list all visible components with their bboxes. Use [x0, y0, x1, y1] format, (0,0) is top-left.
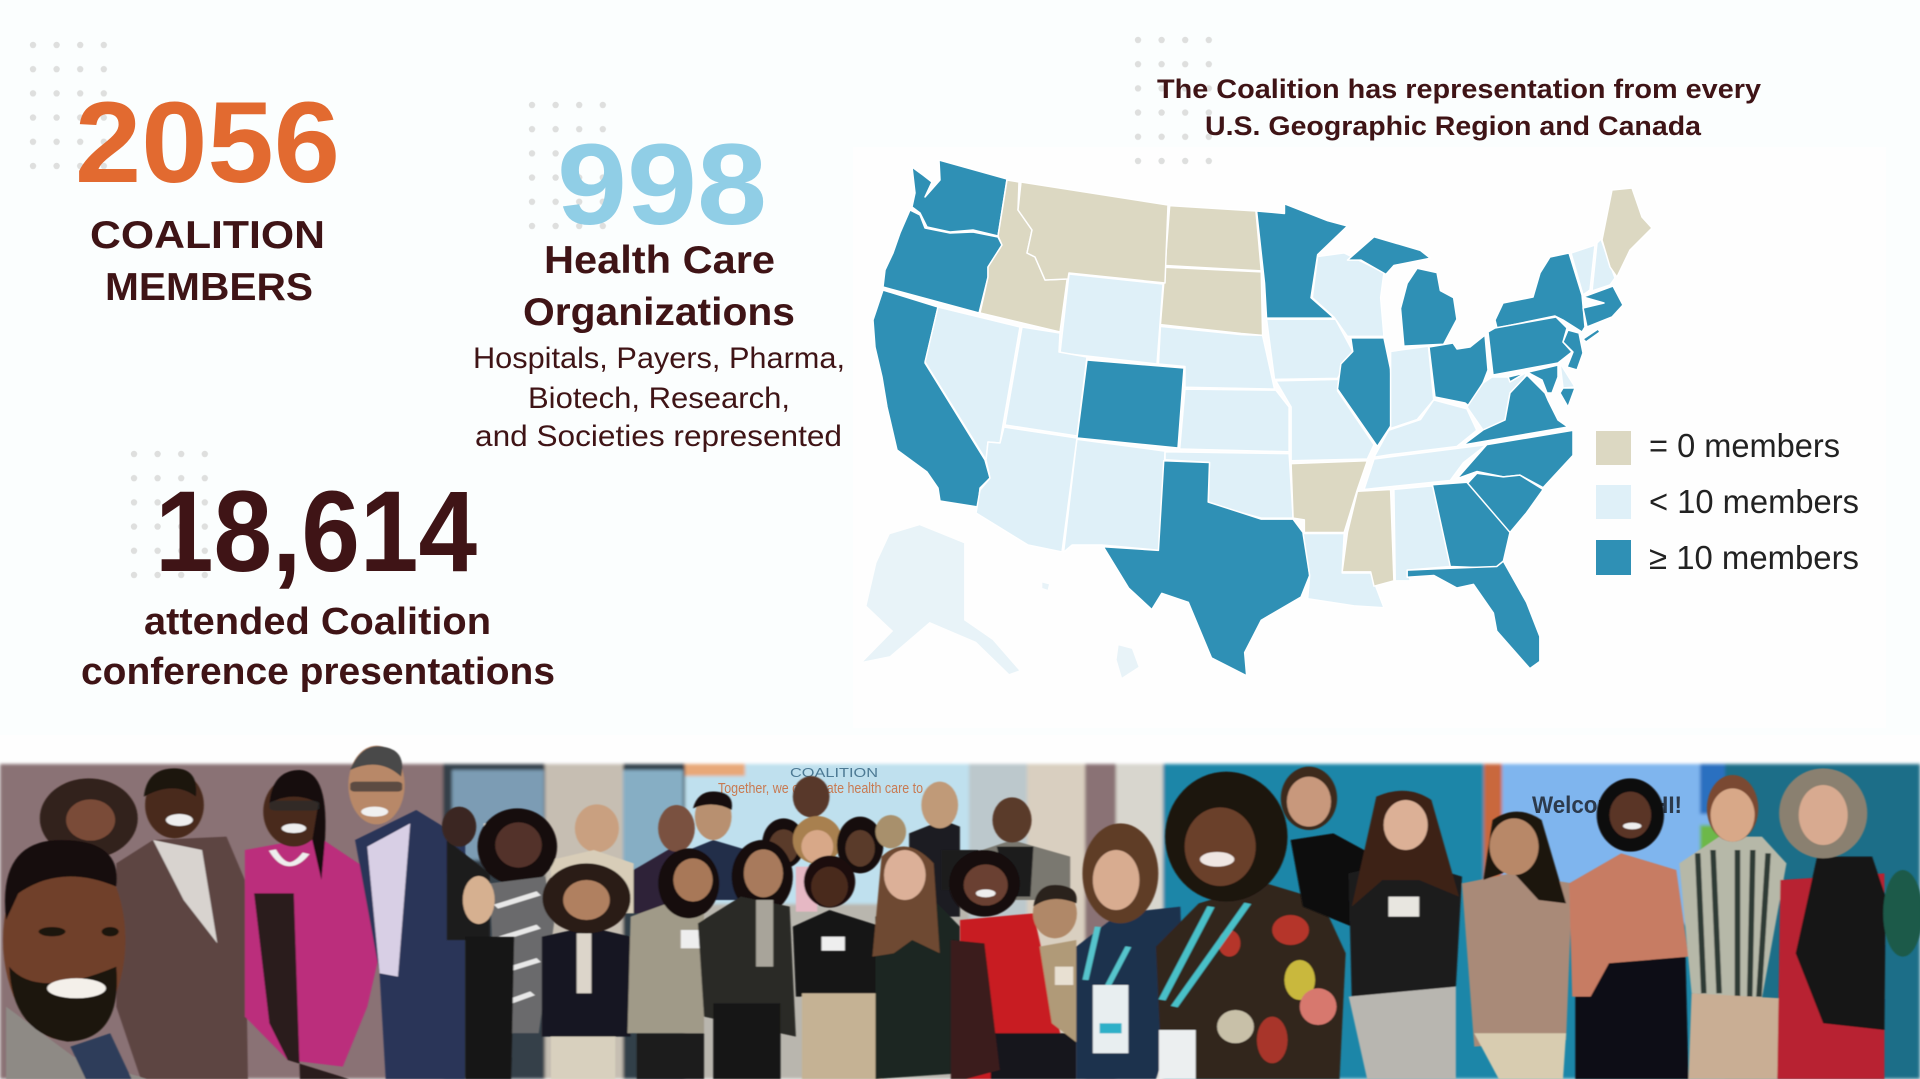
banner: tagline: Together, we co-create health care to [718, 780, 923, 797]
woman in floral blouse [1156, 772, 1346, 1079]
dot grid: organizations [528, 101, 622, 246]
banner text in photo [718, 765, 923, 797]
legend text: zero: = 0 members [1649, 427, 1840, 464]
number 998: 998 [557, 121, 767, 249]
woman in red dress and black blazer [1777, 768, 1886, 1079]
US map: northeastern states [1429, 188, 1652, 445]
label members: MEMBERS [105, 266, 313, 309]
Alaska and Hawaii [863, 525, 1139, 678]
stat: 2056 coalition members [75, 79, 340, 309]
back row people [442, 776, 960, 940]
banner: welcome text: Welcome CHI! [1532, 792, 1682, 819]
woman in pink blazer [245, 770, 383, 1079]
legend text: ten or more: ≥ 10 members [1649, 539, 1859, 576]
heading organizations: Organizations [523, 291, 795, 334]
map heading: U.S. Geographic Region and Canada [1205, 111, 1702, 141]
map heading [1157, 74, 1761, 141]
man in navy suit [348, 746, 465, 1079]
dot grid: members [29, 41, 123, 186]
description line 1: Hospitals, Payers, Pharma, [473, 342, 845, 375]
description line 3: and Societies represented [475, 420, 842, 453]
woman in coral top [1569, 778, 1689, 1079]
number 18,614: 18,614 [155, 468, 477, 596]
man in brown suit [116, 768, 248, 1079]
photo strip backdrop [0, 764, 1920, 1079]
US map: central and southern states [863, 204, 1573, 678]
plant [1883, 870, 1920, 957]
foreground man [3, 840, 147, 1079]
map heading: The Coalition has representation from every [1157, 74, 1761, 104]
woman in back [40, 778, 138, 858]
woman in black top and khaki [793, 856, 882, 1079]
stat: 998 health care organizations [473, 121, 845, 453]
woman with glasses in back [972, 797, 1070, 900]
photo: leadership group [3, 746, 465, 1079]
woman in taupe top [1462, 812, 1572, 1079]
woman in red shirt [942, 850, 1076, 1079]
woman in zebra top [478, 808, 557, 1033]
photo: conference group [442, 776, 960, 1079]
legend swatch: zero [1596, 431, 1631, 465]
woman in grey sweater [628, 848, 719, 1079]
man in patterned shirt [1033, 885, 1078, 1043]
label conference: conference presentations [81, 651, 555, 693]
banner: coalition: COALITION [790, 765, 878, 780]
number 2056: 2056 [75, 79, 340, 207]
legend swatch: under ten [1596, 485, 1631, 519]
woman in olive jacket [698, 840, 796, 1079]
label coalition: COALITION [90, 214, 325, 257]
dot grid: map [1134, 36, 1228, 181]
woman in black top [1281, 767, 1370, 927]
map panel background [853, 147, 1886, 728]
label attended: attended Coalition [144, 601, 491, 643]
heading health care: Health Care [544, 239, 775, 282]
stat: 18,614 attendees [81, 468, 555, 693]
photo: conference group continued [942, 772, 1346, 1079]
legend text: under ten: < 10 members [1649, 483, 1859, 520]
woman in polka dot top [1349, 791, 1462, 1079]
woman in striped shirt [1679, 775, 1786, 1079]
front row woman left [463, 876, 514, 1079]
description line 2: Biotech, Research, [528, 382, 790, 415]
white gap above photo strip [0, 735, 1920, 765]
woman with long brown hair [872, 846, 960, 1079]
woman in black blazer [542, 863, 631, 1079]
woman with teal lanyard [1076, 823, 1183, 1079]
US map: western states [873, 160, 1184, 552]
dot grid: attendees [130, 450, 224, 595]
photo: team group in front of welcome banner [1281, 767, 1920, 1079]
legend swatch: ten or more [1596, 540, 1631, 575]
map legend [1596, 427, 1859, 576]
